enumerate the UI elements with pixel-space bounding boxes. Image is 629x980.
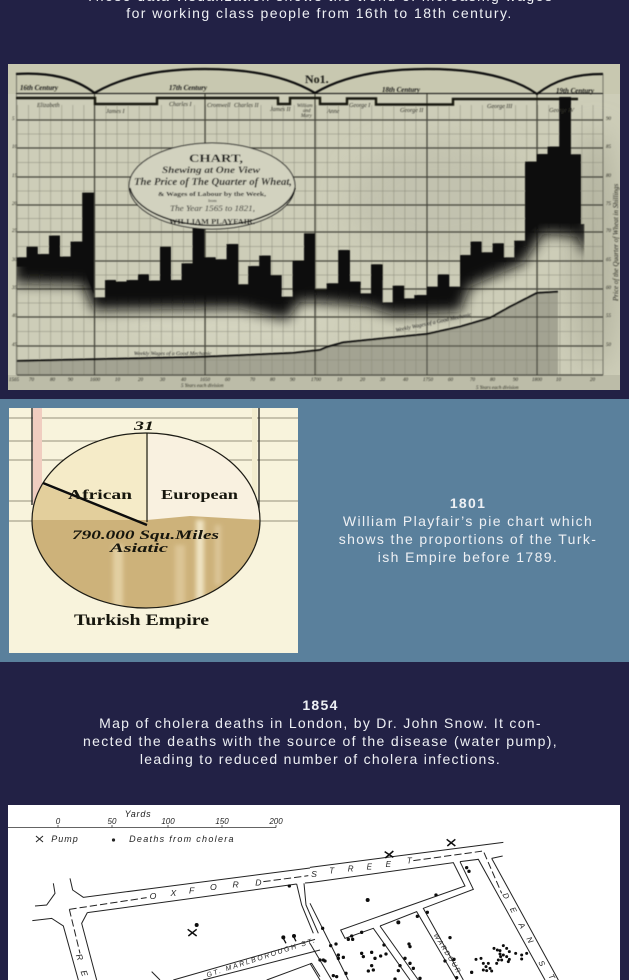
- bottom axis labels: 1650: [200, 378, 210, 383]
- intro text: wages chart description: for working class people from 16th to 18th century.: [126, 5, 513, 21]
- monarch names: Mary: [300, 114, 313, 119]
- map scale and legend: Yards: [125, 809, 151, 819]
- chart: Turkish Empire pie chart: [9, 408, 298, 653]
- side axis labels: 15: [12, 174, 18, 179]
- intro text: wages chart description: [86, 0, 553, 21]
- bottom axis labels: 80: [270, 378, 276, 383]
- map scale and legend: 200: [268, 817, 283, 826]
- paper background: [8, 64, 620, 390]
- wages line captions: Weekly Wages of a Good Mechanic: [134, 350, 212, 357]
- side axis labels: 25: [12, 229, 18, 234]
- monarch names: James II: [270, 107, 291, 113]
- bottom axis labels: 60: [448, 378, 454, 383]
- west half of street plan: [32, 868, 320, 980]
- side axis labels: 85: [606, 145, 612, 150]
- monarch reign step line: [16, 98, 578, 104]
- east half of street plan: [310, 839, 558, 980]
- text block: 1801 description: 1801: [450, 495, 486, 511]
- ruled lines: [9, 418, 298, 521]
- monarch names: Elizabeth: [36, 103, 60, 109]
- chart cartouche: WILLIAM PLAYFAIR.: [169, 217, 255, 226]
- west half of street plan: O: [210, 882, 217, 892]
- side axis labels: 90: [606, 117, 612, 122]
- west half of street plan: GT. MARLBOROUGH ST.: [206, 938, 316, 979]
- east half of street plan: A: [516, 920, 527, 930]
- monarch names: George IV: [549, 108, 575, 114]
- bottom axis labels: 5 Years each division: [181, 384, 224, 389]
- sector dividers: [146, 433, 148, 522]
- east half of street plan: E: [508, 906, 519, 915]
- text block: 1801 description: shows the proportions of the Turk-: [339, 531, 597, 547]
- east half of street plan: E: [386, 860, 392, 869]
- bottom axis labels: 60: [225, 378, 230, 383]
- bottom axis labels: [9, 378, 596, 391]
- monarch names: George III: [487, 104, 513, 110]
- bottom axis labels: 90: [290, 378, 296, 383]
- west half of street plan: R: [74, 953, 85, 962]
- pie outline: [32, 433, 260, 608]
- side axis labels: 10: [12, 145, 18, 150]
- east half of street plan: T: [329, 866, 335, 875]
- wages line captions: [134, 311, 473, 357]
- bottom axis labels: 40: [181, 378, 186, 383]
- side axis labels: Price of the Quarter of Wheat in Shillings: [612, 183, 620, 302]
- bottom axis labels: 10: [115, 378, 120, 383]
- bottom axis labels: 30: [160, 378, 166, 383]
- monarch names: William: [297, 104, 313, 109]
- side axis labels: 20: [12, 202, 18, 207]
- pie labels: 790.000 Squ.Miles: [72, 527, 219, 542]
- side axis labels: 60: [606, 286, 612, 291]
- west half of street plan: D: [255, 877, 261, 887]
- monarch names: George II: [400, 108, 424, 114]
- text block: 1801 description: [339, 495, 597, 565]
- chart headings: No1.: [305, 72, 329, 86]
- pie labels: Turkish Empire: [74, 612, 209, 629]
- map scale and legend: 0: [56, 817, 61, 826]
- map scale and legend: 150: [215, 817, 229, 826]
- bottom axis labels: 70: [250, 378, 256, 383]
- monarch names: [36, 102, 575, 119]
- pump markers: [385, 839, 455, 858]
- bottom axis labels: 1700: [311, 378, 322, 383]
- side axis labels: 35: [12, 286, 18, 291]
- bottom axis labels: 80: [50, 378, 56, 383]
- text block: 1801 description: ish Empire before 1789.: [378, 549, 558, 565]
- text block: 1854 description: Map of cholera deaths in London, by Dr. John Snow. It con-: [99, 715, 542, 731]
- bottom axis labels: 20: [360, 378, 366, 383]
- bottom axis labels: 30: [380, 378, 386, 383]
- bottom axis labels: 10: [556, 378, 562, 383]
- side axis labels: 30: [12, 258, 18, 263]
- side axis labels: 5: [12, 117, 15, 122]
- bottom axis labels: 1800: [532, 378, 542, 383]
- text block: 1854 description: [83, 697, 558, 767]
- west half of street plan: F: [189, 885, 195, 895]
- bottom axis labels: 20: [138, 378, 144, 383]
- wheat price bars: [16, 100, 585, 329]
- chart cartouche: from: [208, 198, 217, 203]
- bottom axis labels: 90: [68, 378, 74, 383]
- chart cartouche: The Year 1565 to 1821,: [170, 204, 255, 213]
- side axis labels: 65: [606, 258, 612, 263]
- pie sectors: [32, 434, 260, 608]
- text block: 1854 description: leading to reduced number of cholera infections.: [140, 751, 501, 767]
- east half of street plan: T: [407, 857, 413, 866]
- cholera death dots: [318, 866, 528, 980]
- west half of street plan: X: [169, 888, 177, 898]
- side axis labels: 45: [12, 343, 18, 348]
- wages area under the line: [17, 292, 558, 375]
- pie labels: [68, 418, 238, 629]
- bottom axis labels: 70: [29, 378, 34, 383]
- bottom axis labels: 10: [337, 378, 342, 383]
- east half of street plan: N: [525, 935, 535, 945]
- chart headings: 19th Century: [556, 87, 595, 95]
- chart headings: 18th Century: [382, 86, 421, 94]
- side axis labels: 40: [12, 314, 18, 319]
- bottom axis labels: 80: [490, 378, 496, 383]
- pie labels: 31: [132, 418, 154, 433]
- monarch names: and: [303, 109, 311, 114]
- side axis labels: 50: [606, 343, 612, 348]
- side axis labels: 70: [606, 229, 612, 234]
- bottom axis labels: 70: [470, 378, 476, 383]
- bottom axis labels: 40: [403, 378, 408, 383]
- pink column: [33, 408, 42, 530]
- pie labels: Asiatic: [108, 540, 168, 555]
- chart headings: [20, 72, 595, 95]
- side axis labels: [12, 117, 620, 348]
- pie labels: European: [161, 488, 238, 503]
- monarch names: George I: [349, 103, 371, 109]
- east half of street plan: D: [501, 891, 511, 901]
- monarch names: Anne: [326, 109, 340, 115]
- bottom axis labels: 90: [513, 378, 518, 383]
- west half of street plan: R: [233, 879, 239, 889]
- chart headings: 17th Century: [169, 84, 208, 92]
- bottom axis labels: 1750: [423, 378, 434, 383]
- chart: Playfair wheat price and wages chart: [8, 64, 620, 390]
- map scale and legend: [8, 809, 283, 844]
- text block: 1801 description: William Playfair’s pie chart which: [343, 513, 593, 529]
- east half of street plan: R: [348, 864, 354, 873]
- chart cartouche: & Wages of Labour by the Week,: [158, 191, 266, 198]
- west half of street plan: S: [311, 869, 317, 879]
- map: John Snow cholera map: [8, 805, 620, 980]
- map scale and legend: Deaths from cholera: [129, 834, 235, 844]
- chart cartouche: CHART,: [189, 151, 243, 165]
- monarch names: Charles I: [169, 102, 193, 108]
- east half of street plan: WARDOUR: [432, 932, 462, 976]
- panel: 1801 pie chart band: [0, 399, 629, 662]
- pump marker and nearby deaths: [188, 884, 296, 943]
- west half of street plan: O: [150, 891, 157, 901]
- map scale and legend: 50: [108, 817, 117, 826]
- pie labels: African: [68, 488, 132, 503]
- bottom axis labels: 20: [590, 378, 596, 383]
- side axis labels: 80: [606, 174, 612, 179]
- east half of street plan: E: [367, 862, 373, 871]
- bottom axis labels: 1600: [90, 378, 100, 383]
- map scale and legend: Pump: [51, 834, 79, 844]
- chart cartouche: Shewing at One View: [162, 165, 261, 175]
- century arcs: [16, 69, 603, 94]
- wages line captions: Weekly Wages of a Good Mechanic: [395, 311, 473, 334]
- monarch names: Cromwell: [207, 103, 231, 109]
- monarch names: Charles II: [234, 103, 260, 109]
- map scale and legend: 100: [161, 817, 175, 826]
- text block: 1854 description: nected the deaths with the source of the disease (water pump),: [83, 733, 558, 749]
- chart cartouche: The Price of The Quarter of Wheat,: [134, 177, 292, 188]
- wages line: [17, 292, 558, 361]
- chart cartouche: [129, 143, 295, 229]
- west half of street plan: E: [79, 969, 90, 978]
- grid lines: [16, 74, 603, 375]
- bottom axis labels: 1565: [9, 378, 20, 383]
- side axis labels: 55: [606, 314, 612, 319]
- text block: 1854 description: 1854: [302, 697, 339, 713]
- east half of street plan: S: [536, 959, 547, 968]
- side axis labels: 75: [606, 202, 612, 207]
- monarch names: James I: [106, 109, 125, 115]
- chart headings: 16th Century: [20, 84, 59, 92]
